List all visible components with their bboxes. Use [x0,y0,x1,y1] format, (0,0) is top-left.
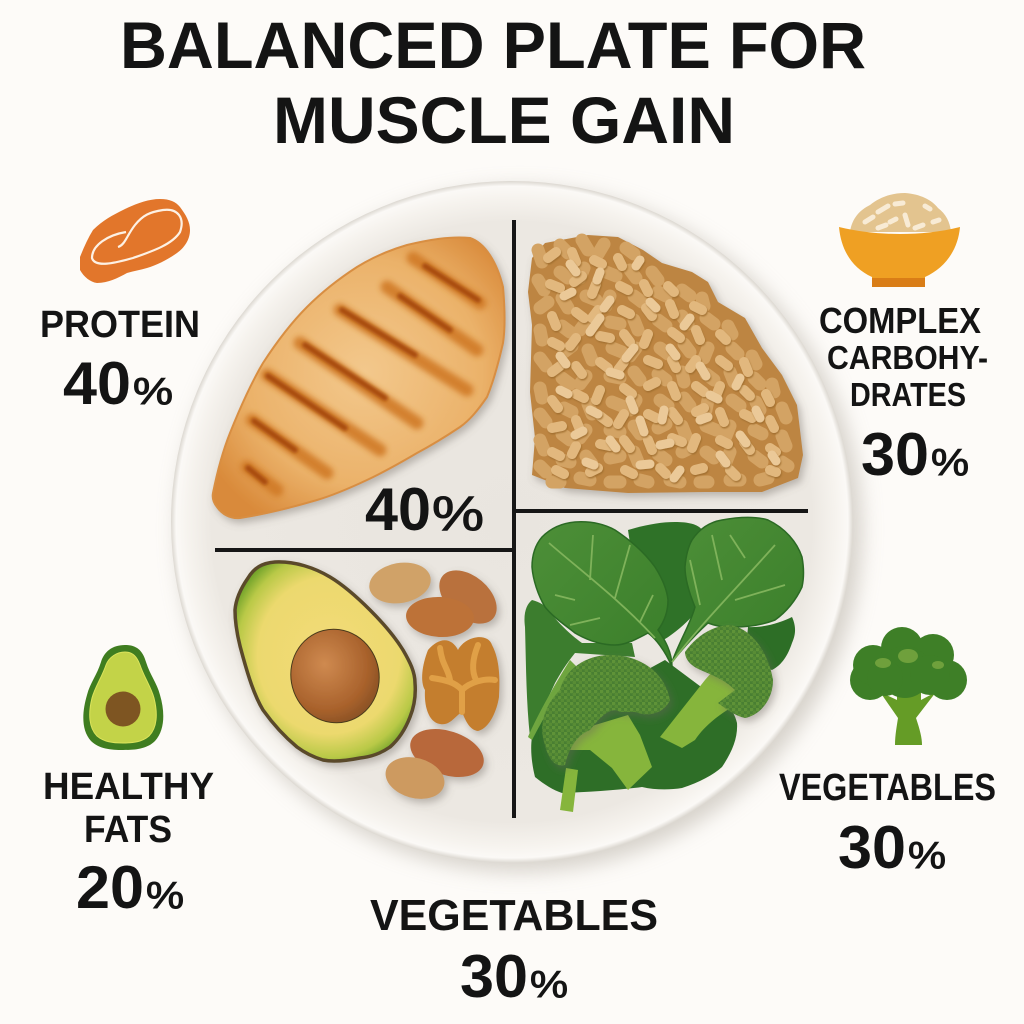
title [120,8,866,157]
label: complex carbohydrates: COMPLEX [819,300,981,341]
label: vegetables bottom: VEGETABLES [370,891,658,940]
icon: avocado (healthy fats) [83,645,163,750]
icon: steak (protein) [80,199,190,283]
label: vegetables bottom: % [530,964,568,1006]
label: protein: 40 [63,350,131,417]
plate label: 40%: 40 [365,476,431,543]
plate label: 40% [365,476,484,543]
label: protein [40,304,200,417]
label: healthy fats: 20 [76,854,144,921]
label: vegetables right [779,767,996,881]
label: vegetables bottom [370,891,658,1010]
label: protein: % [133,371,173,413]
plate label: 40%: % [432,488,484,541]
food: spinach leaves [524,517,804,793]
food: almonds and walnut [366,558,507,805]
food: grilled chicken breast [213,237,504,518]
label: healthy fats [43,766,214,921]
label: vegetables bottom: 30 [460,943,528,1010]
icon: rice bowl (complex carbohydrates) [839,193,960,287]
food: broccoli florets [542,625,773,812]
label: vegetables right: 30 [838,814,906,881]
label: vegetables right: % [908,835,946,877]
label: protein: PROTEIN [40,304,200,346]
title: MUSCLE GAIN [273,83,735,157]
label: complex carbohydrates: CARBOHY- [827,339,988,376]
title: BALANCED PLATE FOR [120,8,866,82]
label: healthy fats: % [146,875,184,917]
food: brown rice [528,235,803,493]
plate [171,181,862,872]
label: healthy fats: FATS [84,809,172,851]
label: complex carbohydrates [819,300,988,488]
food: avocado half [235,562,415,761]
label: complex carbohydrates: % [931,442,969,484]
label: complex carbohydrates: DRATES [850,376,966,413]
plate dividers [215,220,808,818]
label: complex carbohydrates: 30 [861,421,929,488]
icon: broccoli (vegetables) [850,627,967,745]
label: healthy fats: HEALTHY [43,766,214,808]
